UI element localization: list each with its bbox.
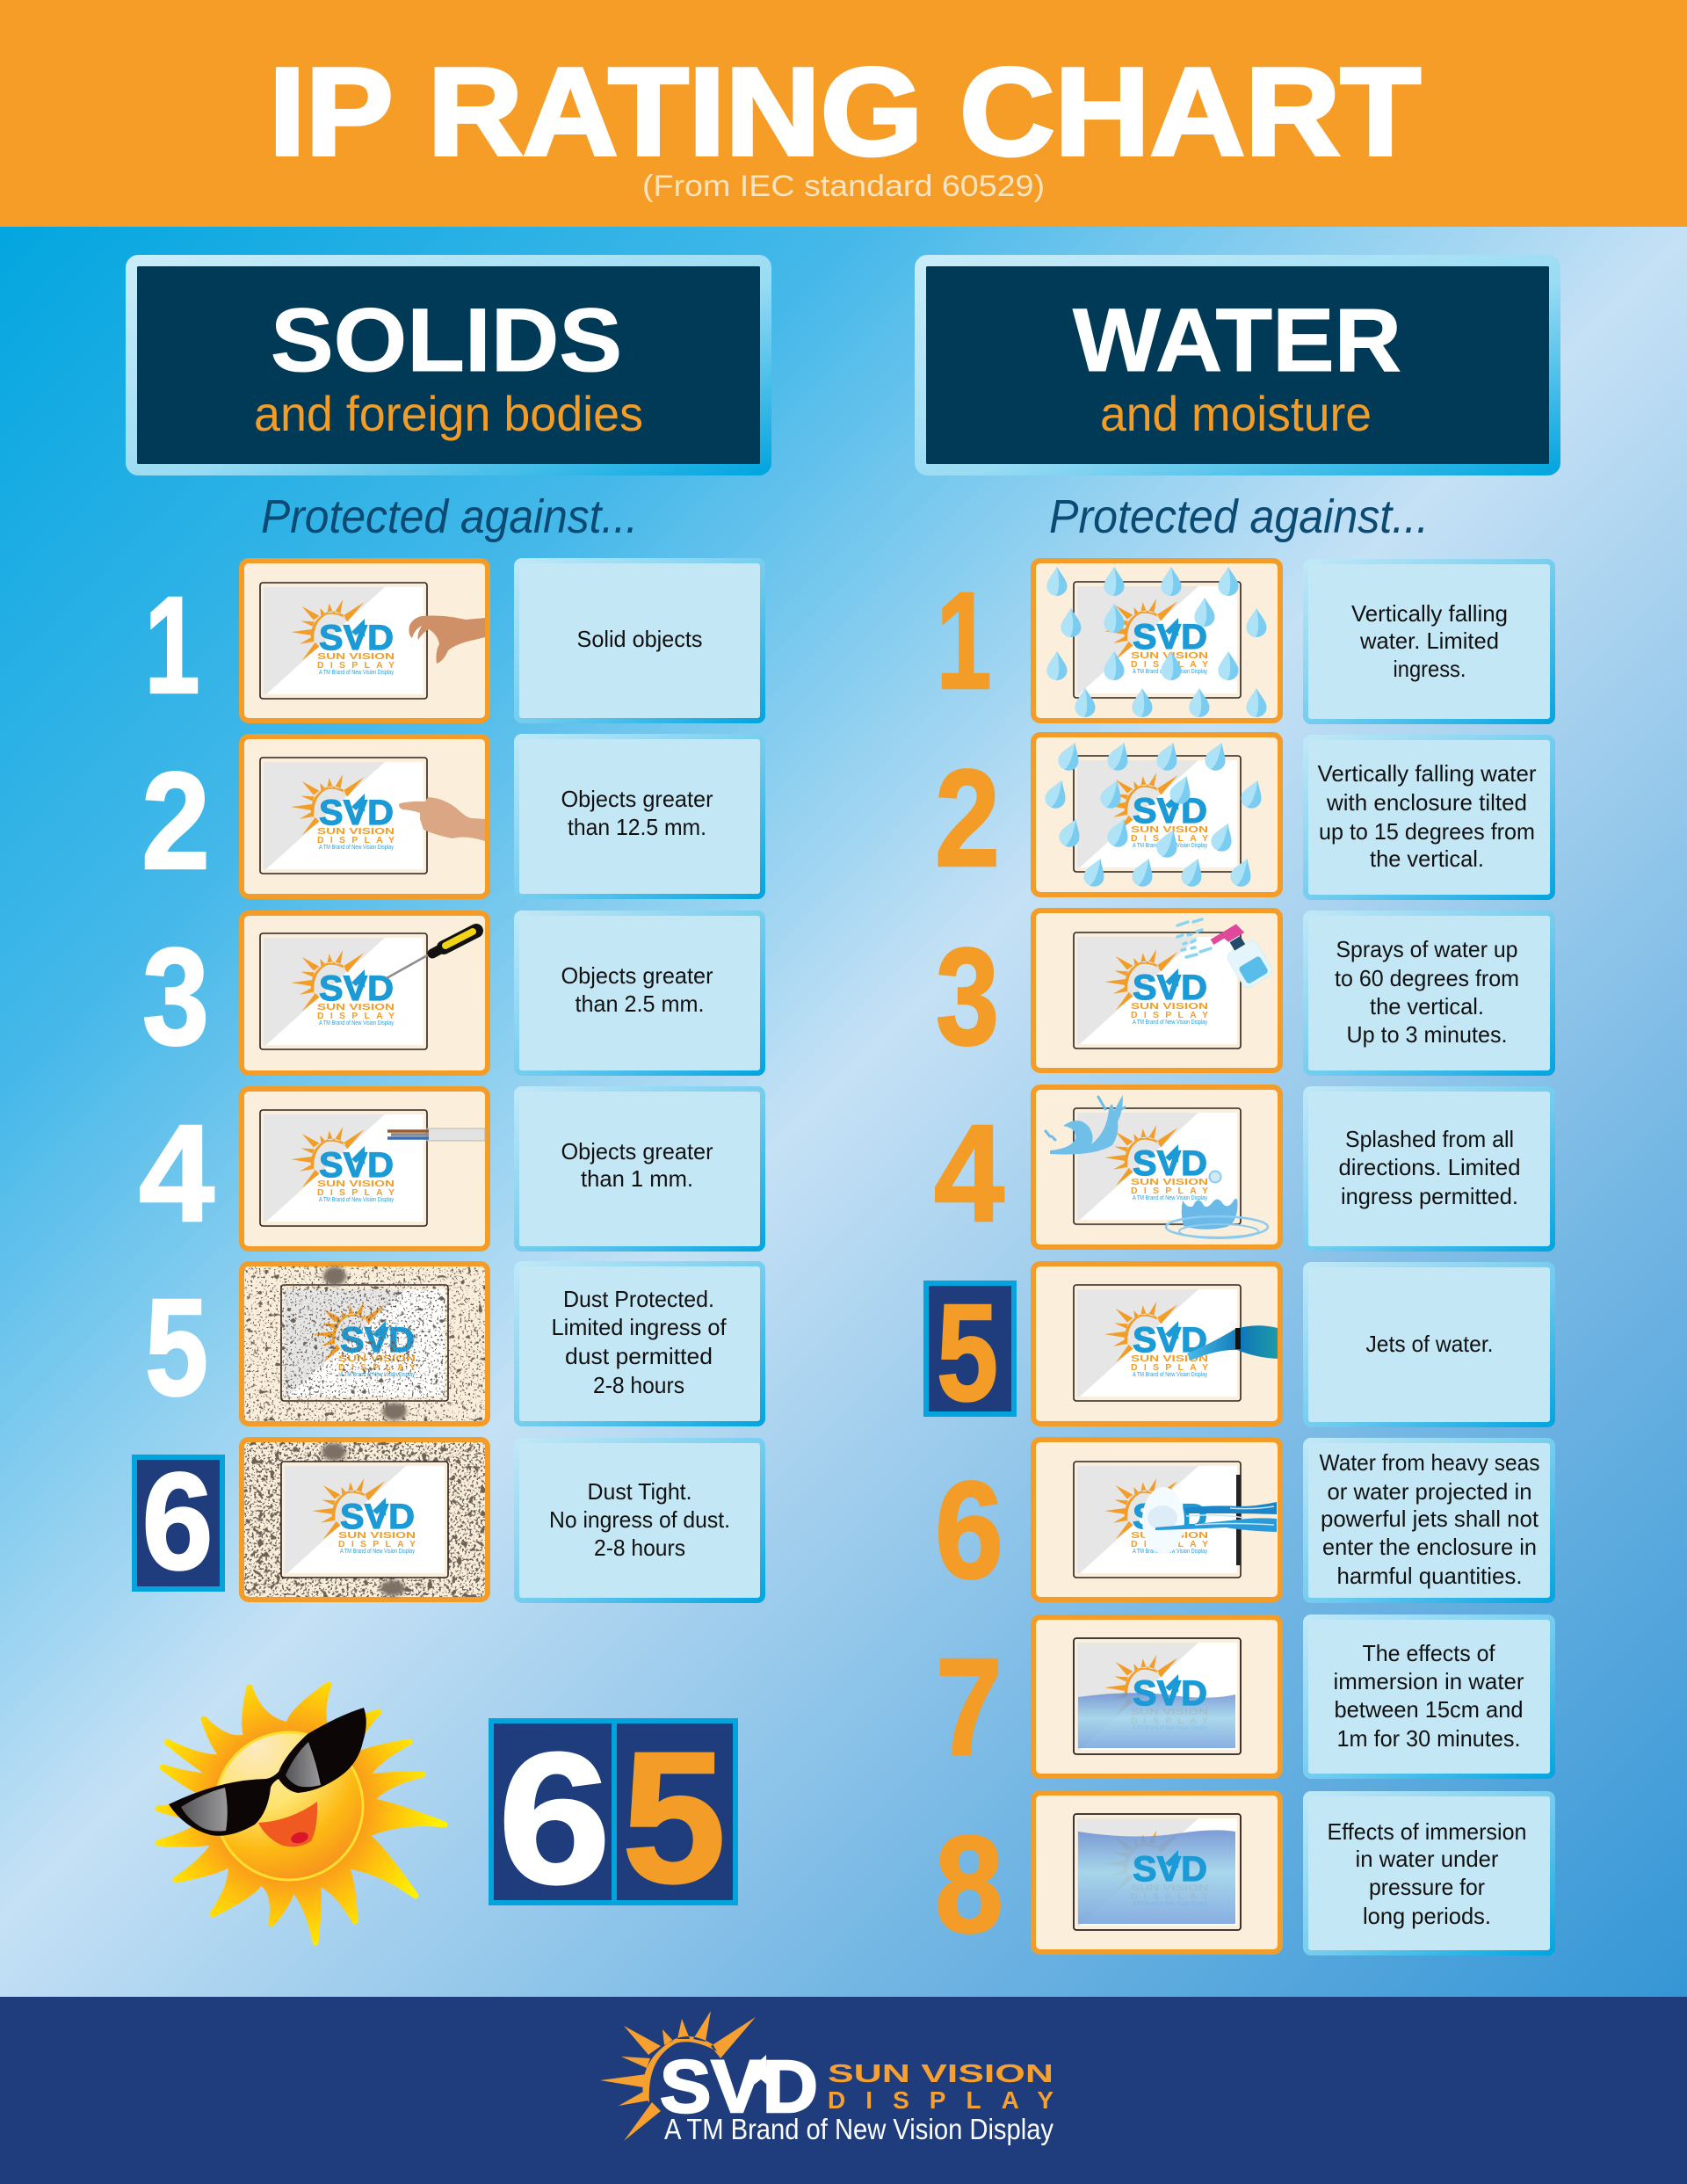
badge: selected 6: 6 [142, 1445, 213, 1599]
illustration: falling drops: A TM Brand of New Vision Display [1133, 669, 1207, 675]
description: Objects greater [561, 962, 713, 989]
illustration: water jet: DISPLAY [1131, 1362, 1208, 1373]
subheading: and moisture: and moisture [1100, 386, 1372, 441]
description: pressure for [1369, 1874, 1485, 1900]
description: in water under [1355, 1846, 1499, 1872]
illustration: finger pointing at screen [242, 736, 488, 896]
water row 8 [935, 1793, 1553, 1962]
description: directions. Limited [1339, 1154, 1520, 1180]
mouth [258, 1802, 317, 1847]
description [517, 1440, 763, 1600]
illustration: screwdriver: SVD [319, 969, 394, 1008]
illustration: finger pointing at screen: A TM Brand of New Vision Display [319, 845, 394, 851]
number 2: 2 [141, 744, 210, 898]
description [517, 561, 763, 721]
illustration: dust over screen: SVD [340, 1321, 415, 1360]
heading: solids: SOLIDS [271, 290, 622, 390]
digit 5: 5 [622, 1713, 726, 1921]
subtitle: (From IEC standard 60529) [642, 170, 1045, 203]
description: up to 15 degrees from [1319, 818, 1535, 845]
description [1306, 1794, 1553, 1953]
footer logo: DISPLAY [828, 2086, 1053, 2114]
illustration: powerful jet: A TM Brand of New Vision Display [1133, 1549, 1207, 1555]
description: Sprays of water up [1336, 936, 1518, 962]
description: the vertical. [1370, 845, 1484, 872]
illustration: dust around sealed screen [242, 1440, 488, 1600]
description: Jets of water. [1365, 1331, 1494, 1357]
description: enter the enclosure in [1322, 1534, 1537, 1560]
description: 1m for 30 minutes. [1337, 1725, 1520, 1752]
description: powerful jets shall not [1321, 1506, 1539, 1532]
title: IP RATING CHART [269, 42, 1421, 182]
description [1306, 913, 1553, 1073]
illustration: dust around sealed screen: DISPLAY [338, 1539, 416, 1549]
number 3: 3 [936, 920, 999, 1074]
illustration: full immersion [1033, 1793, 1280, 1952]
description: Vertically falling [1351, 600, 1508, 627]
illustration: spray bottle: SUN VISION [1131, 1001, 1208, 1012]
illustration: spray bottle [1033, 911, 1280, 1070]
description: immersion in water [1334, 1668, 1524, 1694]
illustration: cable [242, 1089, 488, 1249]
illustration: water jet: SVD [1133, 1321, 1207, 1360]
number 2: 2 [935, 742, 1000, 896]
water row 4 [934, 1087, 1553, 1251]
illustration: falling drops [1033, 561, 1280, 721]
description: between 15cm and [1334, 1696, 1524, 1723]
illustration: tilted drops: SUN VISION [1131, 824, 1208, 835]
water row 6 [935, 1440, 1553, 1607]
illustration: splashes: DISPLAY [1131, 1186, 1208, 1196]
illustration: cable: DISPLAY [317, 1187, 395, 1198]
illustration: screwdriver: SUN VISION [317, 1002, 395, 1012]
description: Vertically falling water [1318, 760, 1537, 787]
water row 7 [936, 1617, 1553, 1784]
panel: solids heading [132, 260, 766, 469]
illustration: screwdriver: DISPLAY [317, 1011, 395, 1021]
footer logo: SVD [660, 2045, 818, 2128]
illustration: hand near screen [242, 561, 488, 721]
number 1: 1 [144, 569, 200, 722]
description: 2-8 hours [593, 1372, 684, 1398]
illustration: hand near screen: SVD [319, 619, 394, 657]
illustration: powerful jet: SUN VISION [1131, 1530, 1208, 1541]
description: harmful quantities. [1337, 1563, 1522, 1589]
description: the vertical. [1370, 993, 1484, 1019]
illustration: dust around sealed screen: A TM Brand of New Vision Display [340, 1549, 415, 1555]
illustration: dust around sealed screen: SUN VISION [338, 1530, 416, 1541]
illustration: splashes: SUN VISION [1131, 1177, 1208, 1187]
illustration: full immersion: A TM Brand of New Vision Display [1133, 1901, 1207, 1907]
description [517, 913, 763, 1073]
description: than 2.5 mm. [575, 990, 705, 1017]
description: No ingress of dust. [549, 1506, 730, 1533]
illustration: tilted drops: A TM Brand of New Vision Display [1133, 843, 1207, 849]
illustration: spray bottle: DISPLAY [1131, 1010, 1208, 1020]
illustration: tilted drops: DISPLAY [1131, 833, 1208, 844]
number 1: 1 [937, 564, 991, 718]
illustration: spray bottle: A TM Brand of New Vision Display [1133, 1019, 1207, 1026]
panel: water heading [921, 260, 1555, 469]
illustration: water jet: A TM Brand of New Vision Display [1133, 1372, 1207, 1378]
illustration: splashes: A TM Brand of New Vision Display [1133, 1195, 1207, 1201]
solids row 4 [139, 1089, 763, 1251]
solids row 5 [145, 1264, 763, 1425]
illustration: partial immersion: DISPLAY [1131, 1716, 1208, 1726]
illustration: tilted drops [1033, 735, 1280, 895]
illustration: finger pointing at screen: SVD [319, 794, 394, 832]
illustration: splashes: SVD [1133, 1144, 1207, 1183]
illustration: falling drops: DISPLAY [1131, 659, 1208, 670]
illustration: powerful jet: DISPLAY [1131, 1539, 1208, 1549]
description: Up to 3 minutes. [1346, 1021, 1508, 1048]
title banner [0, 0, 1687, 227]
digit 6: 6 [498, 1714, 611, 1922]
description: than 1 mm. [581, 1165, 693, 1192]
description [517, 1264, 763, 1424]
description: Splashed from all [1345, 1126, 1514, 1152]
solids row 3 [142, 913, 763, 1074]
description [517, 736, 763, 896]
water row 1 [937, 561, 1553, 722]
number 8: 8 [935, 1808, 1003, 1962]
illustration: dust over screen [242, 1264, 488, 1424]
illustration: cable: SUN VISION [317, 1179, 395, 1189]
heading: water: WATER [1073, 290, 1401, 390]
illustration: spray bottle: SVD [1133, 969, 1207, 1007]
sunglasses [169, 1708, 366, 1836]
description: dust permitted [565, 1343, 713, 1369]
illustration: hand near screen: SUN VISION [317, 651, 395, 662]
illustration: full immersion: SVD [1133, 1850, 1207, 1889]
illustration: hand near screen: DISPLAY [317, 660, 395, 671]
description: Objects greater [561, 1138, 713, 1165]
illustration: partial immersion: SVD [1133, 1674, 1207, 1713]
number 4: 4 [139, 1097, 214, 1251]
illustration: finger pointing at screen: DISPLAY [317, 835, 395, 845]
description: Limited ingress of [552, 1314, 727, 1340]
description: ingress. [1394, 656, 1466, 682]
illustration: partial immersion: SUN VISION [1131, 1707, 1208, 1717]
number 4: 4 [934, 1097, 1004, 1251]
solids row 6 [134, 1440, 763, 1600]
illustration: finger pointing at screen: SUN VISION [317, 826, 395, 837]
number 5: 5 [145, 1271, 208, 1425]
description: or water projected in [1327, 1478, 1532, 1505]
description [1306, 1089, 1553, 1249]
illustration: water jet: SUN VISION [1131, 1353, 1208, 1364]
solids row 2 [141, 736, 763, 898]
icon: sun with sunglasses [158, 1685, 445, 1942]
description: The effects of [1362, 1640, 1495, 1666]
illustration: partial immersion: A TM Brand of New Vision Display [1133, 1725, 1207, 1731]
illustration: dust around sealed screen: SVD [340, 1498, 415, 1536]
illustration: powerful jet [1033, 1440, 1280, 1600]
description: Effects of immersion [1327, 1818, 1527, 1845]
water row 3 [936, 911, 1553, 1074]
number 6: 6 [935, 1454, 1003, 1607]
illustration: screwdriver [242, 913, 488, 1073]
description: Objects greater [561, 786, 713, 812]
badge: selected 5: 5 [937, 1276, 998, 1430]
illustration: dust over screen: DISPLAY [338, 1362, 416, 1373]
description: long periods. [1363, 1903, 1491, 1929]
water row 2 [935, 735, 1553, 897]
description: 2-8 hours [594, 1535, 685, 1561]
illustration: hand near screen: A TM Brand of New Vision Display [319, 670, 394, 676]
description [1306, 562, 1553, 722]
illustration: full immersion: DISPLAY [1131, 1891, 1208, 1902]
solids row 1 [144, 561, 763, 722]
illustration: screwdriver: A TM Brand of New Vision Display [319, 1020, 394, 1027]
description: Dust Protected. [563, 1286, 714, 1312]
description: ingress permitted. [1341, 1183, 1518, 1209]
water row 5 [926, 1264, 1553, 1430]
protected against: water: Protected against... [1049, 490, 1429, 543]
description [517, 1089, 763, 1249]
illustration: cable: SVD [319, 1146, 394, 1185]
description [1306, 1440, 1553, 1600]
illustration: tilted drops: SVD [1133, 792, 1207, 831]
illustration: partial immersion [1033, 1617, 1280, 1776]
illustration: cable: A TM Brand of New Vision Display [319, 1197, 394, 1203]
illustration: dust over screen: A TM Brand of New Vision Display [340, 1372, 415, 1378]
number 7: 7 [936, 1630, 1003, 1784]
illustration: falling drops: SVD [1133, 618, 1207, 657]
description: with enclosure tilted [1326, 789, 1527, 816]
illustration: powerful jet: SVD [1133, 1498, 1207, 1536]
illustration: water jet [1033, 1264, 1280, 1424]
description [1306, 1265, 1553, 1425]
subheading: and foreign bodies: and foreign bodies [254, 386, 643, 441]
description: Dust Tight. [587, 1478, 692, 1505]
footer logo: SUN VISION [828, 2060, 1053, 2088]
description: to 60 degrees from [1335, 965, 1519, 991]
description: Water from heavy seas [1320, 1449, 1539, 1476]
protected against: solids: Protected against... [261, 490, 638, 543]
illustration: full immersion: SUN VISION [1131, 1883, 1208, 1893]
footer logo [600, 2011, 1053, 2145]
illustration: splashes [1033, 1087, 1280, 1247]
badge: rating 65 [491, 1713, 735, 1922]
footer logo: A TM Brand of New Vision Display [664, 2113, 1053, 2145]
illustration: falling drops: SUN VISION [1131, 650, 1208, 661]
description [1306, 737, 1553, 897]
description: Solid objects [576, 626, 703, 652]
description: than 12.5 mm. [568, 814, 706, 840]
illustration: dust over screen: SUN VISION [338, 1353, 416, 1364]
description: water. Limited [1359, 628, 1499, 654]
number 3: 3 [142, 920, 209, 1074]
description [1306, 1617, 1553, 1776]
footer band [0, 1997, 1687, 2184]
